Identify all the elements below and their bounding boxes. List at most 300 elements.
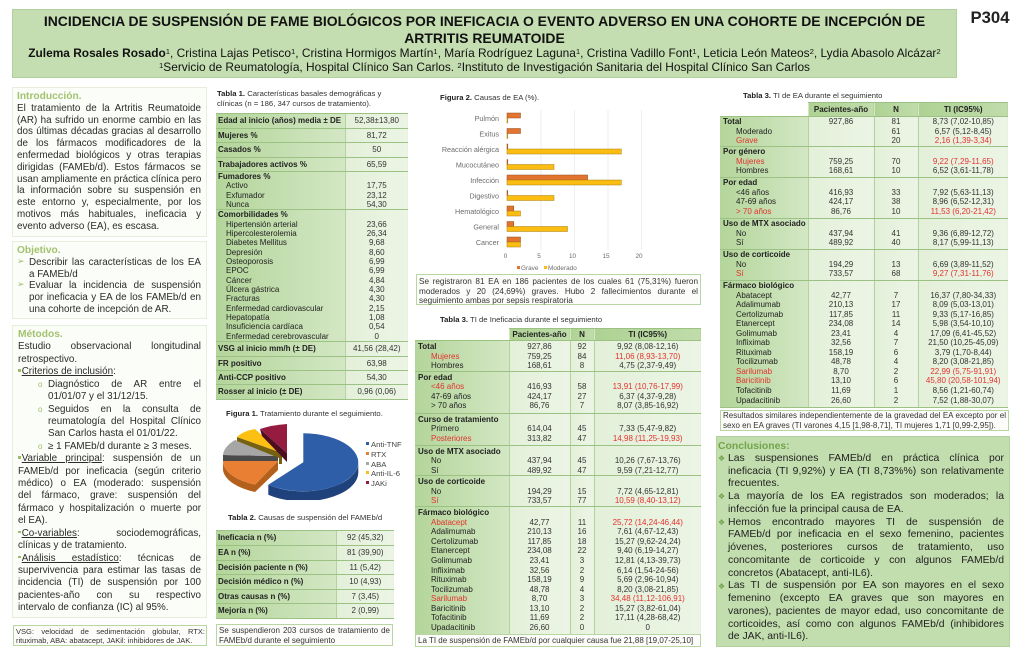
table 3: incidence by adverse event: 4 — [894, 329, 898, 338]
table 2: suspension causes: Ineficacia n (%) — [218, 533, 276, 542]
table 3: incidence by adverse event: 22,99 (5,75-91,91) — [930, 367, 996, 376]
table 1: baseline characteristics: Trabajadores activos % — [218, 160, 307, 169]
table 3: incidence by adverse event: 20 — [892, 136, 900, 145]
table 3: incidence by inefficacy: 437,94 — [527, 456, 552, 465]
table 2: suspension causes: EA n (%) — [218, 548, 251, 557]
table 3: incidence by inefficacy: 18 — [578, 537, 586, 546]
table 3: incidence by adverse event: 7,52 (1,88-30,07) — [933, 396, 994, 405]
table 3: incidence by inefficacy: 42,77 — [529, 518, 550, 527]
table 3: incidence by inefficacy: Hombres — [431, 361, 463, 370]
table 3: incidence by inefficacy: 9 — [580, 575, 584, 584]
conclusions list — [718, 453, 1004, 642]
slice: Anti-TNF — [268, 433, 358, 501]
table 1: baseline characteristics: 23,12 — [367, 191, 387, 200]
caption: tabla 1 — [217, 89, 382, 108]
table 3: incidence by adverse event: 13 — [892, 260, 900, 269]
table 2: suspension causes: Mejoría n (%) — [218, 606, 268, 615]
table 2: suspension causes: 2 (0,99) — [351, 606, 379, 615]
table 3: incidence by adverse event: 70 — [892, 157, 900, 166]
note: adverse events summary: seguimiento ambas por sepsis respiratoria — [419, 296, 573, 305]
category labels: Digestivo — [469, 192, 499, 200]
text: introducción: motivos más habituales, ineficacia y — [17, 209, 201, 220]
table 1: baseline characteristics: 4,84 — [369, 276, 385, 285]
table 3: incidence by adverse event: Total — [723, 117, 742, 126]
table 3: incidence by inefficacy: 424,17 — [527, 392, 552, 401]
table 3: incidence by adverse event: 117,85 — [829, 310, 853, 319]
table 3: incidence by inefficacy: Primero — [431, 424, 459, 433]
table 3: incidence by adverse event: 17,09 (6,41-45,52) — [930, 329, 996, 338]
legend: Grave — [521, 265, 539, 272]
legend: RTX — [371, 450, 386, 459]
table 1: baseline characteristics: Enfermedad cerebrovascular — [226, 332, 329, 341]
table 3: incidence by adverse event: 1 — [894, 386, 898, 395]
legend: Moderado — [548, 265, 577, 272]
table 3: incidence by inefficacy: 26,60 — [529, 623, 550, 632]
table 3: incidence by adverse event: 11,69 — [831, 386, 851, 395]
table 3: incidence by inefficacy: 7 — [580, 401, 584, 410]
conclusions list: FAMEb/d por ineficacia en el sexo femenino, pacientes — [728, 529, 1004, 540]
table 3: incidence by adverse event: 13,10 — [831, 376, 851, 385]
caption: figura 1: Figura 1. Tratamiento durante el seguimiento. — [226, 409, 383, 418]
title: ARTRITIS REUMATOIDE — [404, 30, 565, 46]
text: métodos: médico) o EA (moderado: suspensión — [18, 478, 201, 489]
table 3: incidence by inefficacy: 11,06 (8,93-13,70) — [615, 352, 680, 361]
table 3: incidence by inefficacy: 7,61 (4,67-12,43) — [617, 527, 678, 536]
legend — [517, 265, 577, 272]
conclusions list: frecuentes. — [728, 478, 779, 489]
panel: objetivo — [12, 241, 207, 319]
table 3: incidence by adverse event: 8,96 (6,52-12,31) — [933, 197, 994, 206]
table 1: baseline characteristics: Enfermedad cardiovascular — [226, 304, 323, 313]
table 3: incidence by inefficacy: Tofacitinib — [431, 613, 467, 622]
text: introducción: la información sobre su suspensión en — [17, 185, 201, 196]
table 1: baseline characteristics: 52,38±13,80 — [355, 116, 399, 125]
table 3: incidence by inefficacy: 15,27 (9,62-24,24) — [615, 537, 681, 546]
category labels: Exitus — [479, 130, 499, 138]
table 1: baseline characteristics: Anti-CCP positivo — [218, 373, 286, 382]
table 3: incidence by adverse event: 927,86 — [829, 117, 853, 126]
bars: moderado — [507, 118, 621, 247]
table 3: incidence by adverse event: 8,17 (5,99-11,13) — [933, 238, 994, 247]
table 3: incidence by adverse event: 7,92 (5,63-11,13) — [933, 188, 994, 197]
table 3: incidence by inefficacy: Posteriores — [431, 434, 471, 443]
table 3: incidence by inefficacy: Uso de MTX asociado — [418, 447, 501, 456]
text: métodos: ≥ 1 FAMEb/d durante ≥ 3 meses. — [48, 441, 192, 452]
table 1: baseline characteristics — [216, 113, 408, 400]
conclusions list: corticoides, así como con algunos FAMEb/d (inhibidores — [728, 619, 1004, 630]
table 3: incidence by adverse event: Rituximab — [736, 348, 772, 357]
table 3: incidence by inefficacy: 25,72 (14,24-46,44) — [613, 518, 683, 527]
table 3: incidence by adverse event: TI (IC95%) — [944, 105, 983, 114]
table 2: suspension causes: 7 (3,45) — [351, 592, 379, 601]
table 3: incidence by inefficacy: N — [579, 330, 585, 339]
table 3: incidence by inefficacy: Etanercept — [431, 546, 470, 555]
table 1: baseline characteristics: 8,60 — [369, 248, 385, 257]
table 3: incidence by inefficacy: 8,07 (3,85-16,92) — [617, 401, 678, 410]
text: introducción: dirigidas (FAMEb/d). Estos fármacos se — [17, 162, 201, 173]
table 3: incidence by inefficacy: 27 — [578, 392, 586, 401]
text: métodos: FAMEb/d por ineficacia (según criterio — [18, 466, 201, 477]
table 1: baseline characteristics: Insuficiencia cardíaca — [226, 322, 303, 331]
objective list — [17, 257, 201, 315]
caption: figura 2: Figura 2. Causas de EA (%). — [440, 93, 539, 102]
text: métodos: Seguidos en la consulta de — [48, 404, 201, 415]
table 1: baseline characteristics: 0 — [375, 332, 379, 341]
abbreviations note: rituximab, ABA: abatacept, JAKil: inhibidores de JAK. — [16, 636, 192, 645]
conclusions list: ineficacia (TI 9,92%) y EA (TI 8,73%%) son relativamente — [728, 466, 1004, 477]
table 3: incidence by adverse event: 10 — [892, 207, 900, 216]
conclusions list: Las suspensiones FAMEb/d en práctica clínica por — [728, 453, 1004, 464]
note: severity results: Resultados similares independientemente de la gravedad del EA excepto por el — [723, 411, 1006, 420]
note: courses suspended: FAMEb/d durante el seguimiento — [219, 636, 335, 645]
table 3: incidence by adverse event: 81 — [892, 117, 900, 126]
heading: objetivo: Objetivo. — [17, 245, 61, 256]
slice: RTX — [223, 461, 278, 492]
note: courses suspended — [216, 624, 393, 646]
table 3: incidence by inefficacy: 2 — [580, 566, 584, 575]
table 3: incidence by inefficacy: 13,91 (10,76-17,99) — [613, 382, 683, 391]
table 3: incidence by inefficacy: Golimumab — [431, 556, 472, 565]
table 3: incidence by inefficacy: Pacientes-año — [512, 330, 567, 339]
table 3: incidence by adverse event: 8,70 — [833, 367, 849, 376]
table 1: baseline characteristics: Osteoporosis — [226, 257, 273, 266]
text: métodos: fármaco y hospitalización o muerte por — [18, 503, 201, 514]
table 3: incidence by inefficacy: 7,33 (5,47-9,82) — [619, 424, 676, 433]
conclusions list: Hemos encontrado mayores TI de suspensión de — [728, 517, 1004, 528]
table 3: incidence by adverse event: 42,77 — [831, 291, 851, 300]
conclusions list: femenino (excepto EA graves que son mayores en — [728, 593, 1004, 604]
table 3: incidence by adverse event: 8,73 (7,02-10,85) — [933, 117, 994, 126]
table 3: incidence by inefficacy: 210,13 — [527, 527, 552, 536]
table 3: incidence by adverse event: 759,25 — [829, 157, 853, 166]
title — [44, 12, 925, 46]
table 3: incidence by inefficacy: 6,37 (4,37-9,28) — [619, 392, 676, 401]
bar chart: adverse event causes — [442, 110, 643, 272]
value axis labels: 15 — [602, 253, 610, 260]
table 3: incidence by adverse event: 4 — [894, 357, 898, 366]
table 1: baseline characteristics: 81,72 — [367, 131, 387, 140]
table 3: incidence by adverse event: 41 — [892, 229, 900, 238]
text: métodos: San Carlos hasta el 01/01/22. — [48, 428, 178, 439]
table 3: incidence by inefficacy: Abatacept — [431, 518, 467, 527]
table 3: incidence by adverse event: 6,57 (5,12-8,45) — [935, 127, 992, 136]
table 3: incidence by adverse event: 9,22 (7,29-11,65) — [933, 157, 994, 166]
table 3: incidence by adverse event: Mujeres — [736, 157, 764, 166]
table 3: incidence by adverse event: 61 — [892, 127, 900, 136]
table 3: incidence by inefficacy: 13,10 — [529, 604, 550, 613]
table 2: suspension causes: Decisión paciente n (%) — [218, 563, 308, 572]
table 3: incidence by adverse event: 6 — [894, 376, 898, 385]
objective list: ➢ — [17, 257, 25, 267]
text: métodos: retrospectivo. — [18, 354, 77, 365]
table 3: incidence by adverse event: 38 — [892, 197, 900, 206]
caption: tabla 1: Tabla 1. Características basales demográficas y — [217, 89, 381, 98]
table 3: incidence by inefficacy: No — [431, 456, 441, 465]
table 1: baseline characteristics: 4,30 — [369, 285, 385, 294]
table 3: incidence by inefficacy: 9,59 (7,21-12,77) — [617, 466, 678, 475]
text: introducción: usan ampliamente en práctica clínica pero — [17, 174, 201, 185]
text: métodos: intervalo de confianza (IC) al 95%. — [18, 602, 168, 613]
table 1: baseline characteristics: 6,99 — [369, 266, 385, 275]
text: introducción: (AR) ha sufrido un enorme cambio en las — [17, 115, 201, 126]
table 1: baseline characteristics: FR positivo — [218, 359, 262, 368]
legend: ABA — [371, 460, 387, 469]
table 3: incidence by inefficacy: 5,69 (2,96-10,94) — [617, 575, 678, 584]
table 3: incidence by adverse event: 26,60 — [831, 396, 851, 405]
table 3: incidence by adverse event: Grave — [736, 136, 758, 145]
table 3: incidence by inefficacy: Sí — [431, 466, 439, 475]
table 3: incidence by adverse event — [720, 102, 1008, 408]
table 1: baseline characteristics: 50 — [372, 145, 381, 154]
table 3: incidence by inefficacy: 4,75 (2,37-9,49) — [619, 361, 676, 370]
table 3: incidence by adverse event: Fármaco biológico — [723, 281, 794, 290]
table 3: incidence by inefficacy: 9,92 (8,08-12,16) — [617, 342, 678, 351]
table 3: incidence by inefficacy: 86,76 — [529, 401, 550, 410]
table 1: baseline characteristics: 26,34 — [367, 229, 387, 238]
table 3: incidence by inefficacy: 10,59 (8,40-13,12) — [615, 496, 681, 505]
note: overall incidence: La TI de suspensión de FAMEb/d por cualquier causa fue 21,88 [19,07-25,10] — [418, 636, 693, 645]
table 3: incidence by adverse event: Abatacept — [736, 291, 772, 300]
text: métodos: o — [38, 405, 42, 414]
table 3: incidence by inefficacy: 92 — [578, 342, 586, 351]
table 1: baseline characteristics: Hipercolesterolemia — [226, 229, 297, 238]
table 3: incidence by inefficacy: 15,27 (3,82-61,04) — [615, 604, 681, 613]
category labels: Cancer — [476, 238, 500, 247]
table 3: incidence by inefficacy: 58 — [578, 382, 586, 391]
text: introducción: de los fármacos modificadores de la — [17, 138, 201, 149]
slice: ABA — [223, 440, 278, 461]
objective list: Evaluar la incidencia de suspensión — [29, 280, 201, 291]
table 1: baseline characteristics: 41,56 (28,42) — [353, 344, 401, 353]
caption: tabla 3 EA: Tabla 3. TI de EA durante el seguimiento — [743, 91, 882, 100]
table 3: incidence by adverse event: 2,16 (1,39-3,34) — [935, 136, 992, 145]
table 3: incidence by adverse event: 437,94 — [829, 229, 853, 238]
table 3: incidence by adverse event: Upadacitinib — [736, 396, 780, 405]
table 3: incidence by adverse event: Moderado — [736, 127, 772, 136]
table 3: incidence by inefficacy: 168,61 — [527, 361, 552, 370]
table 1: baseline characteristics: 65,59 — [367, 160, 387, 169]
table 3: incidence by adverse event: Por edad — [723, 178, 757, 187]
panel: conclusiones: ❖ — [718, 454, 725, 463]
table 3: incidence by adverse event: Golimumab — [736, 329, 777, 338]
category labels: Hematológico — [455, 207, 499, 216]
value axis labels — [504, 253, 643, 260]
table 3: incidence by adverse event: 168,61 — [829, 166, 853, 175]
objective list: ➢ — [17, 280, 25, 290]
text: introducción: enfermedad biológicos y otras terapias — [17, 150, 201, 161]
table 3: incidence by inefficacy: TI (IC95%) — [628, 330, 667, 339]
table 1: baseline characteristics: 0,96 (0,06) — [357, 387, 396, 396]
category labels: Mucocutáneo — [456, 160, 499, 170]
panel: introducción — [12, 87, 207, 237]
panel: métodos — [12, 325, 207, 618]
table 3: incidence by adverse event: 40 — [892, 238, 900, 247]
table 1: baseline characteristics: Activo — [226, 181, 248, 190]
table 3: incidence by adverse event: 6,69 (3,89-11,52) — [933, 260, 994, 269]
table 3: incidence by adverse event: 7 — [894, 338, 898, 347]
table 3: incidence by inefficacy: 15 — [578, 487, 586, 496]
table 3: incidence by adverse event: 9,36 (6,89-12,72) — [933, 229, 994, 238]
table 1: baseline characteristics: 4,30 — [369, 294, 385, 303]
table 3: incidence by adverse event: 8,20 (3,08-21,85) — [933, 357, 994, 366]
conclusions list: varones), pacientes de mayor edad, uso concomitante de — [728, 606, 1004, 617]
table 1: baseline characteristics: Depresión — [226, 248, 262, 257]
table 3: incidence by adverse event: 489,92 — [829, 238, 853, 247]
table 3: incidence by inefficacy: 759,25 — [527, 352, 552, 361]
pie chart: treatment — [223, 424, 402, 500]
panel: conclusiones: ❖ — [718, 492, 725, 501]
table 3: incidence by adverse event: Hombres — [736, 166, 768, 175]
text: métodos: 01/01/07 y el 31/12/15. — [48, 391, 148, 402]
abbreviations note: VSG: velocidad de sedimentación globular, RTX: — [16, 627, 205, 636]
conclusions list: infección fue la principal causa de EA. — [728, 504, 904, 515]
table 3: incidence by adverse event: 68 — [892, 269, 900, 278]
table 3: incidence by adverse event: 16,37 (7,80-34,33) — [930, 291, 996, 300]
table 3: incidence by adverse event: 86,76 — [831, 207, 851, 216]
text: introducción: El tratamiento de la Artritis Reumatoide — [17, 103, 201, 114]
note: severity results: sexo en EA graves (TI varones 4,15 [1,98-8,71], TI mujeres 1,71 [0,99-2,95]). — [723, 421, 996, 430]
text: métodos: o — [38, 442, 42, 451]
table 3: incidence by inefficacy: 489,92 — [527, 466, 552, 475]
table 3: incidence by adverse event: 733,57 — [829, 269, 853, 278]
text: métodos: incidencia (TI) de suspensión por 100 — [18, 577, 201, 588]
table 3: incidence by inefficacy: 22 — [578, 546, 586, 555]
text: métodos: pacientes-año con su respectivo — [18, 590, 201, 601]
heading: conclusiones: Conclusiones: — [718, 441, 790, 452]
objective list: una cohorte de incepción de AR. — [29, 304, 171, 315]
heading: introducción: Introducción. — [17, 91, 82, 102]
table 3: incidence by inefficacy: Baricitinib — [431, 604, 466, 613]
table 3: incidence by inefficacy — [415, 328, 701, 634]
table 3: incidence by inefficacy: 4 — [580, 585, 584, 594]
text: métodos — [18, 341, 201, 613]
table 3: incidence by adverse event: 6 — [894, 348, 898, 357]
table 3: incidence by adverse event: 14 — [892, 319, 900, 328]
table 3: incidence by adverse event: 2 — [894, 396, 898, 405]
note: adverse events summary: moderados y 20 (24,69%) graves. Hubo 2 fallecimientos durante el — [419, 287, 698, 296]
table 3: incidence by adverse event: N — [893, 105, 899, 114]
note: severity results — [720, 410, 1009, 431]
table 3: incidence by adverse event: 11,53 (6,20-21,42) — [931, 207, 996, 216]
conclusions list: La mayoría de los EA registrados son moderados; la — [728, 491, 1004, 502]
table 3: incidence by adverse event: 32,56 — [831, 338, 851, 347]
table 3: incidence by inefficacy: 2 — [580, 604, 584, 613]
table 1: baseline characteristics: Diabetes Mellitus — [226, 238, 287, 247]
table 3: incidence by inefficacy: 10,26 (7,67-13,76) — [615, 456, 681, 465]
table 3: incidence by adverse event: 45,80 (20,58-101,94) — [926, 376, 1001, 385]
conclusions list: concomitante de corticoide y con algunos FAMEb/d — [728, 555, 1004, 566]
conclusions list: Las TI de suspensión por EA son mayores en el sexo — [728, 580, 1004, 591]
table 3: incidence by inefficacy: Adalimumab — [431, 527, 475, 536]
table 3: incidence by inefficacy: 8,70 — [532, 594, 547, 603]
table 3: incidence by inefficacy: Uso de corticoide — [418, 477, 485, 486]
table 3: incidence by inefficacy: > 70 años — [431, 401, 466, 410]
table 1: baseline characteristics: EPOC — [226, 266, 249, 275]
table 1: baseline characteristics: 0,54 — [369, 322, 385, 331]
table 3: incidence by inefficacy: Upadacitinib — [431, 623, 475, 632]
conclusions list: de JAK, anti-IL6). — [728, 631, 808, 642]
table 3: incidence by inefficacy: No — [431, 487, 441, 496]
table 3: incidence by inefficacy: 11 — [578, 518, 586, 527]
table 3: incidence by inefficacy: 17,11 (4,28-68,42) — [615, 613, 680, 622]
table 3: incidence by inefficacy: 11,69 — [530, 613, 549, 622]
table 1: baseline characteristics: Comorbilidades % — [218, 210, 288, 219]
table 3: incidence by adverse event: Sí — [736, 269, 744, 278]
table 3: incidence by inefficacy: 7,72 (4,65-12,81) — [617, 487, 678, 496]
table 1: baseline characteristics: Mujeres % — [218, 131, 258, 140]
text: métodos: el EA). — [18, 515, 48, 526]
table 1: baseline characteristics: Cáncer — [226, 276, 252, 285]
text: métodos: reumatología del Hospital Clínico — [48, 416, 201, 427]
category labels: Pulmón — [475, 114, 499, 123]
table 3: incidence by adverse event: Etanercept — [736, 319, 775, 328]
table 3: incidence by adverse event: Certolizumab — [736, 310, 783, 319]
table 3: incidence by adverse event: No — [736, 260, 746, 269]
table 2: suspension causes: 10 (4,93) — [349, 577, 381, 586]
table 3: incidence by inefficacy: 23,41 — [529, 556, 550, 565]
table 3: incidence by inefficacy: Sarilumab — [431, 594, 467, 603]
caption: tabla 3 ineficacia: Tabla 3. TI de Ineficacia durante el seguimiento — [440, 315, 602, 324]
text: introducción: evento adverso (EA), es escasa. — [17, 221, 159, 232]
text: métodos: clínicas y de tratamiento. — [18, 540, 127, 551]
table 3: incidence by inefficacy: Tocilizumab — [431, 585, 473, 594]
table 3: incidence by inefficacy: 8,20 (3,08-21,85) — [617, 585, 678, 594]
legend — [366, 440, 402, 488]
table 3: incidence by inefficacy: 45 — [578, 424, 586, 433]
text: métodos: Estudio observacional longitudinal — [18, 341, 201, 352]
table 1: baseline characteristics: 63,98 — [367, 359, 387, 368]
note: courses suspended: Se suspendieron 203 cursos de tratamiento de — [219, 626, 390, 635]
legend: Anti-IL-6 — [371, 469, 400, 478]
table 3: incidence by inefficacy: 14,98 (11,25-19,93) — [613, 434, 683, 443]
text: métodos: Análisis estadístico: técnicas de — [22, 553, 201, 564]
table 1: baseline characteristics: Fracturas — [226, 294, 260, 303]
table 1: baseline characteristics: Casados % — [218, 145, 261, 154]
table 3: incidence by inefficacy: Sí — [431, 496, 439, 505]
text: métodos: Co-variables: sociodemográficas, — [22, 528, 201, 539]
table 1: baseline characteristics: Exfumador — [226, 191, 265, 200]
value axis labels: 0 — [504, 253, 508, 260]
table 1: baseline characteristics: Nunca — [226, 200, 249, 209]
table 3: incidence by adverse event: 9,33 (5,17-16,85) — [933, 310, 994, 319]
table 3: incidence by inefficacy: 32,56 — [529, 566, 550, 575]
table 3: incidence by inefficacy: 0 — [580, 623, 584, 632]
table 1: baseline characteristics: Fumadores % — [218, 172, 270, 181]
table 3: incidence by adverse event: Sarilumab — [736, 367, 772, 376]
table 3: incidence by adverse event: 17 — [892, 300, 900, 309]
category labels: Reacción alérgica — [442, 145, 499, 154]
table 1: baseline characteristics: Hipertensión arterial — [226, 220, 298, 229]
table 3: incidence by inefficacy: 47 — [578, 466, 586, 475]
table 3: incidence by inefficacy: 12,81 (4,13-39,73) — [615, 556, 681, 565]
panel: conclusiones — [716, 436, 1010, 647]
text: métodos: Variable principal: suspensión de un — [22, 453, 201, 464]
authors: Zulema Rosales Rosado1, Cristina Lajas Petisco1, Cristina Hormigos Martín1, María Rodríguez Laguna1, Cristina Vadillo Font1, Leticia León Mateos2, Lydia Abasolo Alcázar2 — [28, 46, 941, 60]
table 3: incidence by inefficacy: 77 — [578, 496, 586, 505]
table 1: baseline characteristics: 54,30 — [367, 373, 387, 382]
panel: conclusiones: ❖ — [718, 518, 725, 527]
table 3: incidence by adverse event: 416,93 — [829, 188, 853, 197]
table 3: incidence by adverse event: Uso de corticoide — [723, 250, 790, 259]
table 1: baseline characteristics: 2,15 — [369, 304, 385, 313]
category labels: Infección — [470, 176, 499, 185]
table 2: suspension causes: 92 (45,32) — [347, 533, 383, 542]
table 3: incidence by adverse event: <46 años — [736, 188, 769, 197]
table 3: incidence by inefficacy: Rituximab — [431, 575, 467, 584]
table 3: incidence by adverse event: 210,13 — [829, 300, 853, 309]
value axis labels: 5 — [537, 253, 541, 260]
table 3: incidence by adverse event: 47-69 años — [736, 197, 776, 206]
